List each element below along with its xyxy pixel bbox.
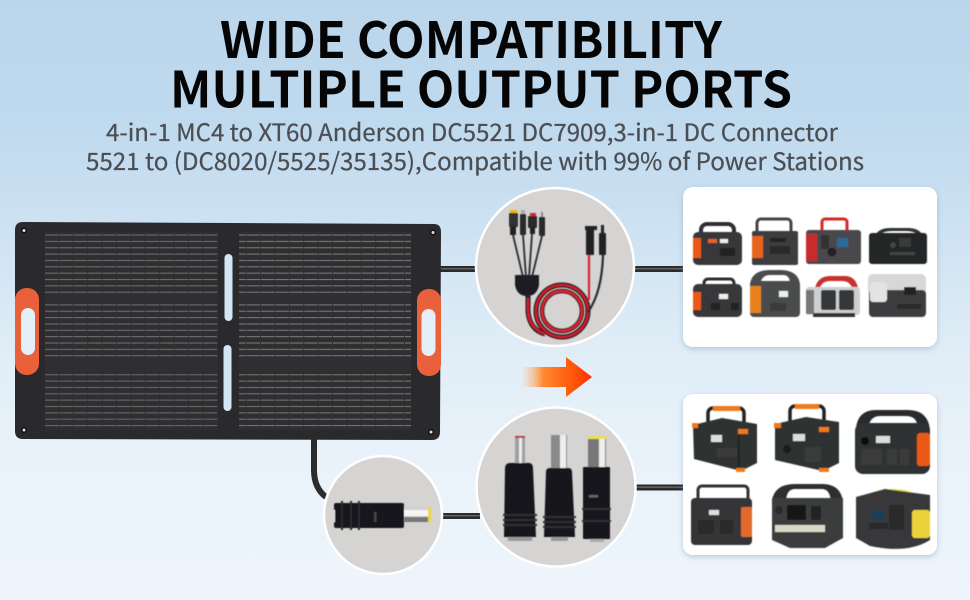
MC4 leads [588,254,603,312]
four connectors [509,210,545,236]
solar panel [15,222,441,440]
device 1 [693,224,742,265]
circle: DC connector [324,456,442,574]
device 3 [806,219,861,264]
device 13 [772,484,843,548]
title: WIDE COMPATIBILITY [220,1,723,73]
right handle [417,289,441,376]
device 9 [692,406,757,472]
device 4 [869,228,927,264]
corner grommets [22,228,435,434]
device 8 [868,274,926,317]
subtitle: 5521 to (DC8020/5525/35135),Compatible with 99% of Power Stations [86,142,864,177]
adapter 2 [543,435,576,541]
card: compatible stations bottom [683,394,937,555]
solar cells left [45,232,218,430]
MC4 connectors [585,225,606,255]
subtitle: 4-in-1 MC4 to XT60 Anderson DC5521 DC7909,3-in-1 DC Connector [106,113,839,148]
connector body [333,501,404,530]
device 10 [774,404,839,472]
cable: top circle to device card [633,266,685,272]
device 7 [806,276,860,317]
device 12 [691,486,752,545]
cable: small connector to adapters [440,513,480,519]
adapter 3 [582,436,611,542]
device 11 [855,410,930,474]
card: compatible stations top [683,187,937,347]
left handle [15,288,39,375]
title [170,1,792,122]
subtitle [86,113,864,177]
cable: adapters to device card [635,484,685,490]
device 2 [752,219,798,265]
device 5 [693,279,742,317]
center slots [224,254,232,411]
cable coil [528,285,588,337]
cable: panel down to small connector [314,438,326,497]
device 14 [856,489,930,549]
title: MULTIPLE OUTPUT PORTS [170,50,792,122]
circle: 4-in-1 cable [476,188,634,346]
device 6 [750,270,800,317]
connector tip [404,507,431,522]
circle: 3-in-1 adapters [476,408,636,566]
solar cells right [239,232,411,430]
cable: panel to top circle [438,266,478,272]
splitter hub [515,275,539,296]
arrow [522,357,592,397]
adapter 1 [503,436,537,541]
branch wires [513,234,542,277]
